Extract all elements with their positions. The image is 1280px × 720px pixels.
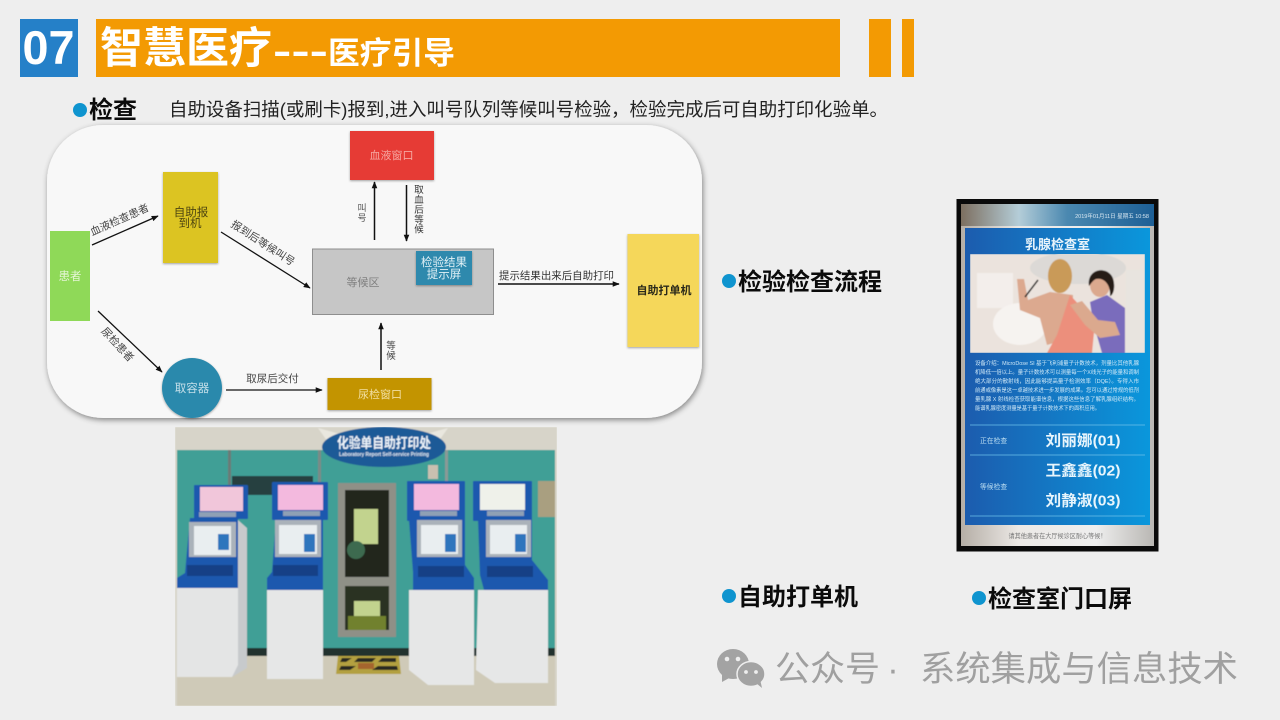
node: result display screen: 提示屏 <box>427 267 461 281</box>
screen room title: 乳腺检查室 <box>1025 237 1090 252</box>
screen equipment intro text: 前通或像素是这一卓越技术进一步发展的成果。您可以通过常规的低剂 <box>975 386 1139 394</box>
node: waiting area: 等候区 <box>346 275 380 289</box>
floor mat <box>336 656 401 674</box>
banner accent bars <box>869 19 914 77</box>
node: urine window: 尿检窗口 <box>358 387 402 401</box>
arrow: container to urine window: 取尿后交付 <box>246 372 299 385</box>
arrow: back to waiting after blood draw: 血 <box>414 194 424 206</box>
arrow: called to blood window: 叫 <box>357 203 367 213</box>
node: report printer: 自助打单机 <box>636 283 692 297</box>
screen queue list: 刘丽娜(01) <box>1046 432 1120 450</box>
label: door screen: 检查室门口屏 <box>988 585 1132 613</box>
kiosk 1 <box>177 485 248 677</box>
screen header strip: 2019年01月11日 星期五 10:58 <box>1075 212 1149 220</box>
node: urine container <box>162 358 222 418</box>
heading: inspection: 检查 <box>89 96 137 124</box>
screen queue list: 王鑫鑫(02) <box>1046 462 1120 480</box>
screen queue list: 等候检查 <box>980 482 1007 491</box>
watermark: · <box>887 650 899 689</box>
screen equipment intro text: 量乳腺 X 射线检查获取能谱信息，根据这些信息了解乳腺组织结构。 <box>975 395 1139 403</box>
title banner: 医疗引导 <box>328 36 455 71</box>
title banner: --- <box>273 30 328 71</box>
arrow: back to waiting after blood draw: 取 <box>414 185 424 196</box>
kiosk 2 <box>267 482 328 679</box>
overhead sign <box>318 427 448 467</box>
door-side queue screen <box>956 199 1158 552</box>
arrow: back to waiting after blood draw: 等 <box>414 214 424 226</box>
node: blood window <box>350 131 434 180</box>
label: inspection process: 检验检查流程 <box>738 268 882 296</box>
node: patient: 患者 <box>58 270 82 283</box>
screen header strip <box>961 204 1154 226</box>
photo: self-service report kiosks <box>175 427 557 706</box>
screen equipment intro text: 能谱乳腺密度测量是基于量子计数技术下的面积应用。 <box>975 404 1100 412</box>
screen queue list: 正在检查 <box>980 436 1007 445</box>
door <box>338 483 396 637</box>
node: blood window: 血液窗口 <box>370 148 414 162</box>
screen equipment intro text: 绝大部分的散射线，因此能够提高量子检测效率（DQE）。专得入市 <box>975 377 1140 385</box>
node: waiting area <box>312 249 494 314</box>
arrow: back to waiting after blood draw <box>406 185 424 241</box>
screen equipment intro text: 设备介绍：MicroDose SI 基于飞利浦量子计数技术，剂量比其他乳腺 <box>975 359 1139 367</box>
arrow: patient to urine container: 尿检患者 <box>98 325 137 364</box>
screen footer notice: 请其他患者在大厅候诊区耐心等候！ <box>1008 531 1106 540</box>
arrow: check-in machine to waiting area <box>221 218 310 288</box>
arrow: patient to urine container <box>98 311 162 372</box>
watermark <box>717 649 1238 689</box>
node: self check-in machine: 到机 <box>178 216 202 230</box>
arrow: waiting area to report printer: 提示结果出来后自助打印 <box>499 269 614 282</box>
node: urine container: 取容器 <box>175 381 210 395</box>
arrow: called to blood window: 号 <box>357 213 367 223</box>
node: self check-in machine: 自助报 <box>174 205 209 219</box>
overhead sign: 化验单自助打印处 <box>337 435 431 451</box>
title banner <box>96 19 840 77</box>
watermark: 公众号 <box>775 650 880 689</box>
arrow: back to waiting after blood draw: 后 <box>414 205 424 216</box>
panel: inspection flow chart <box>47 125 702 418</box>
arrow: urine window to waiting area <box>381 323 396 370</box>
section number badge: 07 <box>22 21 74 74</box>
watermark: 系统集成与信息技术 <box>920 650 1238 689</box>
arrow: urine window to waiting area: 候 <box>386 350 396 362</box>
arrow: container to urine window <box>226 372 322 390</box>
overhead sign: Laboratory Report Self-service Printing <box>339 452 429 458</box>
arrow: patient to check-in machine: 血液检查患者 <box>88 201 151 239</box>
node: report printer <box>628 234 699 347</box>
label: self-service printer: 自助打单机 <box>738 584 858 611</box>
arrow: called to blood window <box>357 182 374 240</box>
screen photo: mammography exam <box>970 252 1145 353</box>
arrow: check-in machine to waiting area: 报到后等候叫号 <box>229 218 297 269</box>
node: result display screen: 检验结果 <box>421 255 467 269</box>
title banner: 智慧医疗 <box>100 25 272 73</box>
kiosk 3 <box>407 481 474 685</box>
screen equipment intro text: 机降低一倍以上。量子计数技术可以测量每一个X线光子的能量和调制 <box>975 368 1139 376</box>
node: result display screen <box>416 251 472 285</box>
screen queue list <box>970 425 1145 516</box>
screen equipment intro text <box>975 359 1140 412</box>
screen queue list: 刘静淑(03) <box>1046 492 1120 510</box>
screen blue panel <box>965 228 1150 525</box>
node: self check-in machine <box>163 172 218 263</box>
arrow: urine window to waiting area: 等 <box>386 340 396 352</box>
arrow: back to waiting after blood draw: 候 <box>414 224 424 236</box>
description text: 自助设备扫描(或刷卡)报到,进入叫号队列等候叫号检验，检验完成后可自助打印化验单。 <box>169 99 888 120</box>
node: urine window <box>328 378 432 410</box>
kiosk 4 <box>473 481 548 683</box>
icon: wechat <box>717 649 765 688</box>
node: patient <box>50 231 90 321</box>
